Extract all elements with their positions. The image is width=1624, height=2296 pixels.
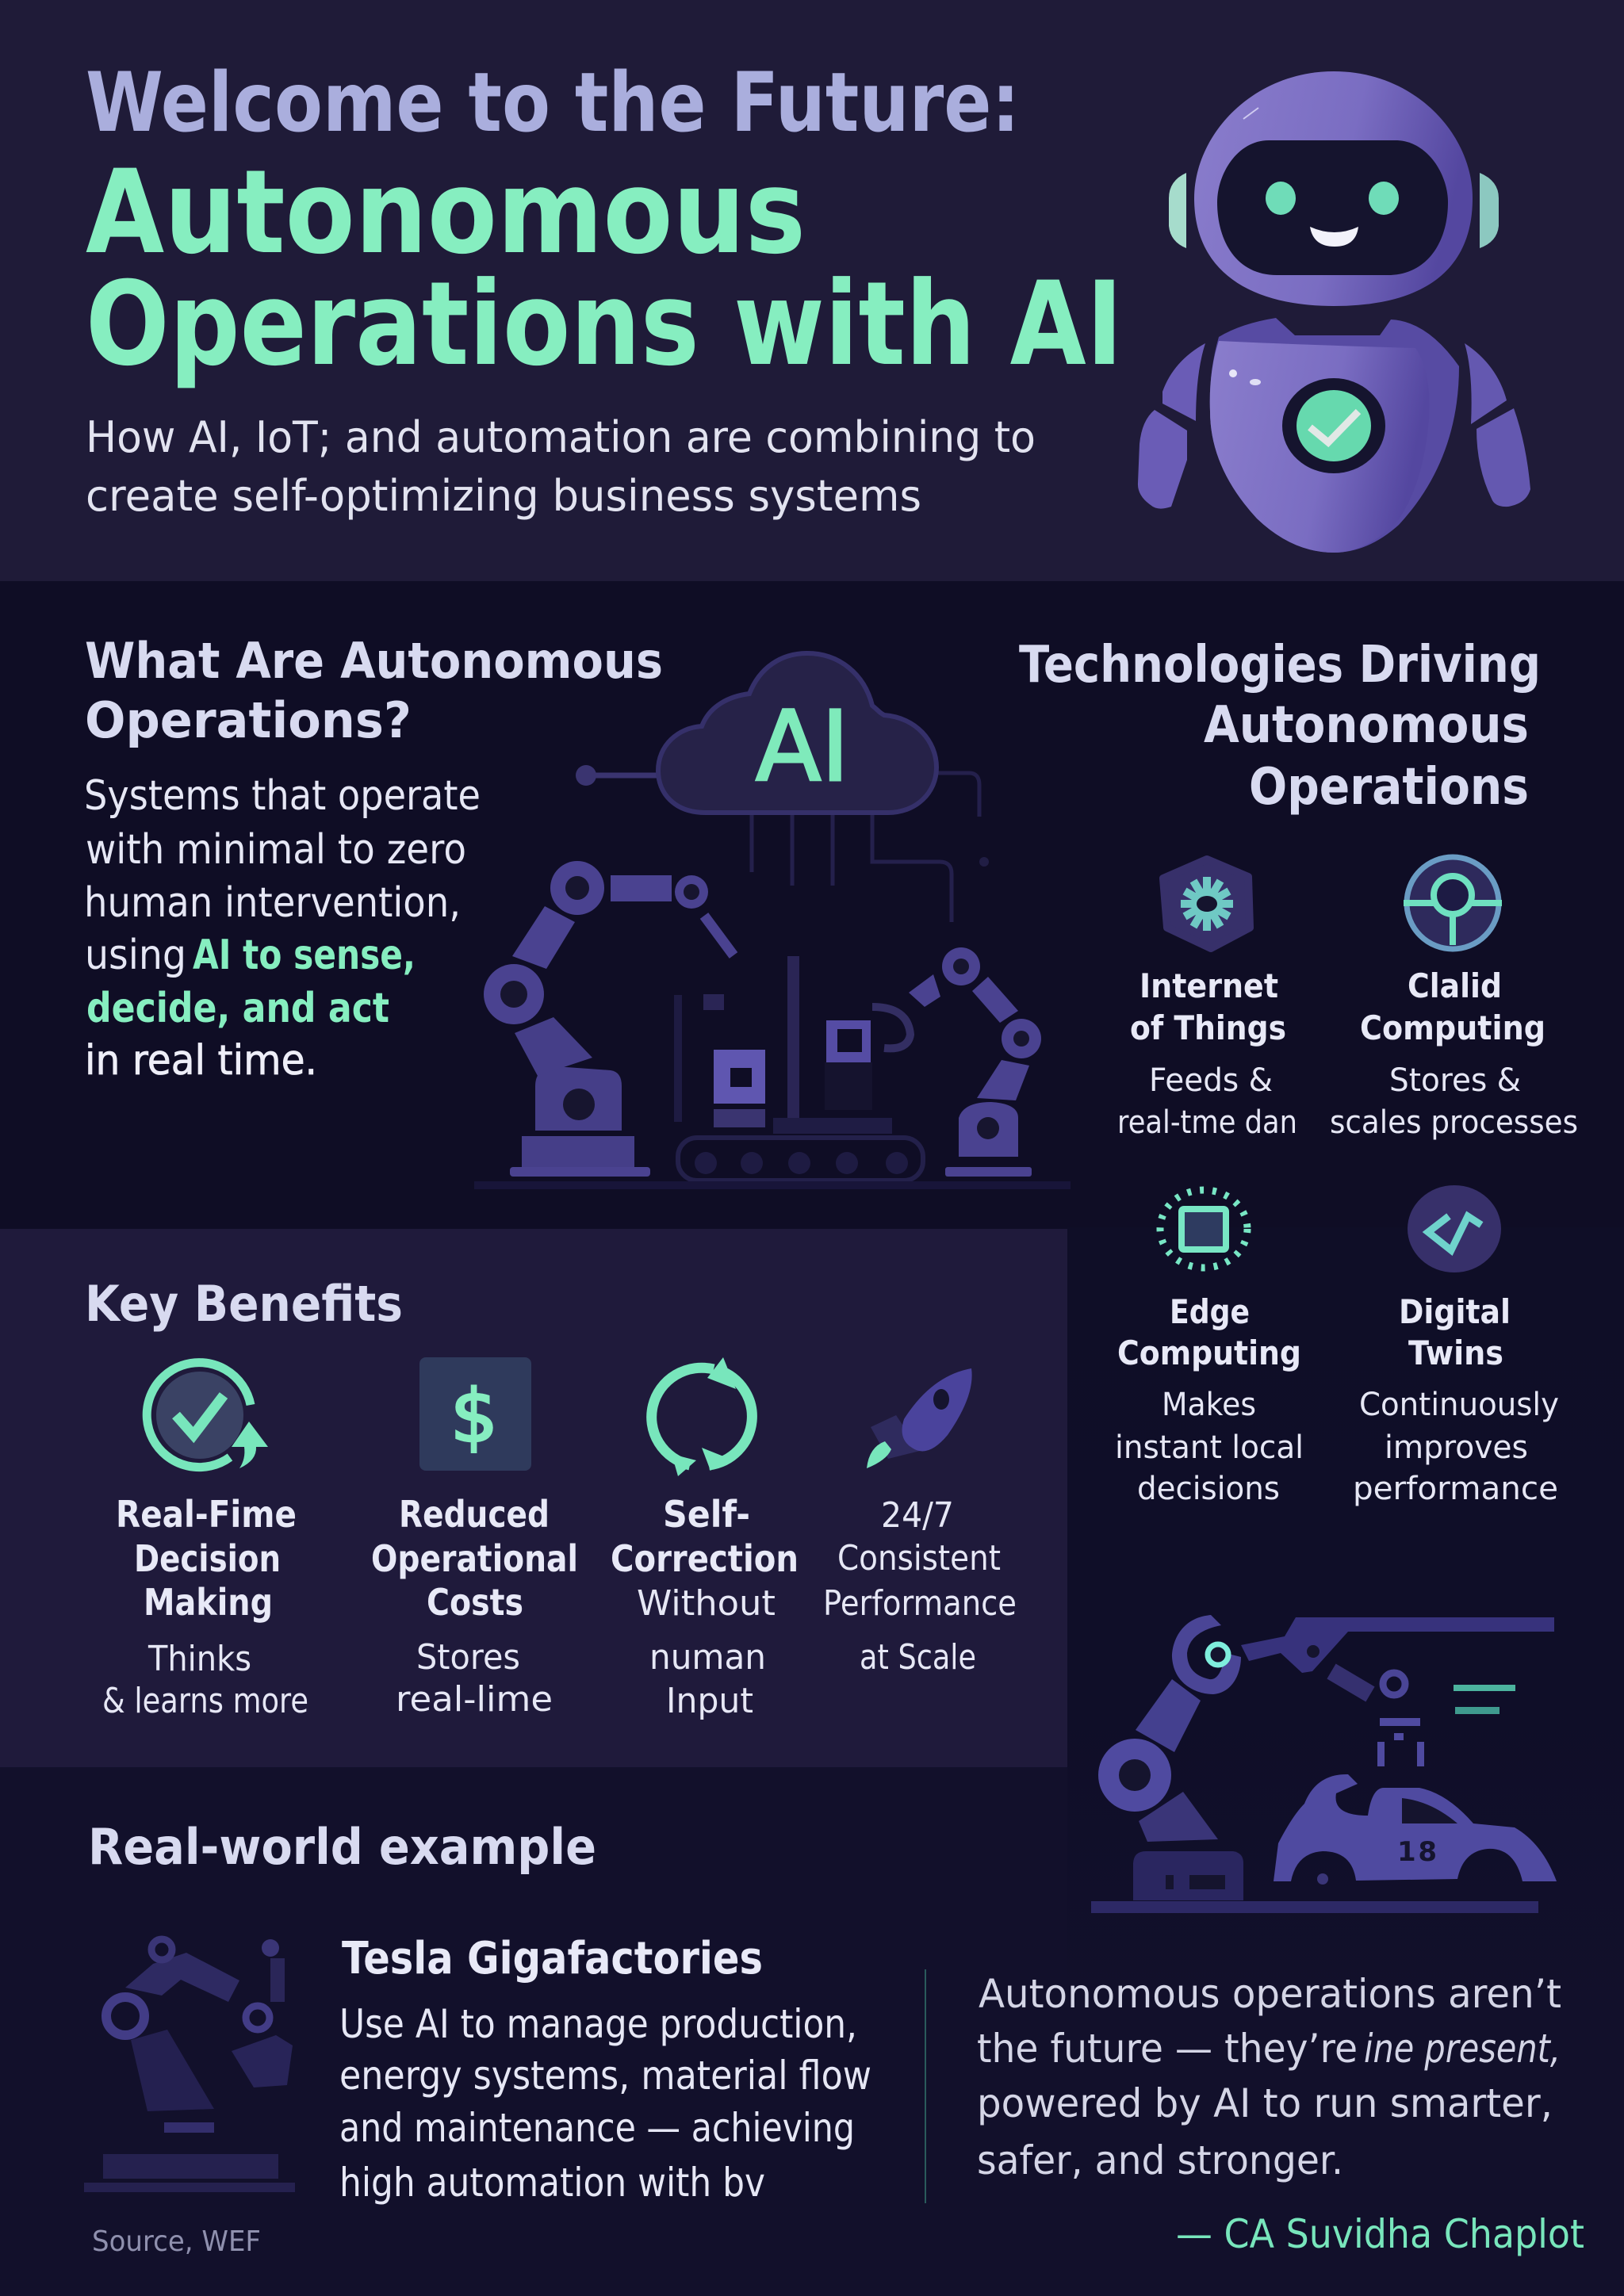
callout: closing quote: ine present, bbox=[1364, 2026, 1561, 2072]
tech item: cloud computing: Stores & bbox=[1389, 1062, 1521, 1099]
text block: definition: decide, and act bbox=[86, 985, 389, 1032]
benefit: real-time decision making bbox=[102, 1363, 308, 1721]
text block: definition: with minimal to zero bbox=[86, 826, 466, 874]
heading: technologies driving autonomous operations: Technologies Driving bbox=[1019, 636, 1541, 695]
icon: car: 18 bbox=[1397, 1836, 1437, 1868]
heading: technologies driving autonomous operations: Autonomous bbox=[1204, 696, 1529, 755]
text block: tesla gigafactories: Tesla Gigafactories bbox=[342, 1933, 763, 1984]
title bbox=[86, 55, 1123, 392]
subtitle: How AI, IoT; and automation are combining to bbox=[86, 412, 1036, 462]
benefit: real-time decision making: Decision bbox=[134, 1537, 281, 1580]
text block: tesla gigafactories bbox=[339, 1933, 871, 2206]
benefit: 24/7 consistent performance: 24/7 bbox=[881, 1495, 954, 1536]
icon: AI cloud bbox=[658, 653, 936, 813]
panel: key benefits bbox=[0, 1229, 1067, 1767]
benefit: 24/7 consistent performance: at Scale bbox=[860, 1637, 976, 1678]
heading: what are autonomous operations: What Are Autonomous bbox=[85, 632, 663, 690]
text block: definition: AI to sense, bbox=[193, 932, 416, 979]
benefit: self-correction: Input bbox=[666, 1681, 753, 1721]
text block: definition bbox=[84, 772, 481, 1085]
tech item: digital twins: Digital bbox=[1399, 1292, 1511, 1331]
tech item: digital twins: Continuously bbox=[1359, 1387, 1559, 1423]
benefit: self-correction bbox=[611, 1357, 799, 1721]
text block: definition: Systems that operate bbox=[84, 772, 481, 820]
panel: technologies grid bbox=[1115, 857, 1578, 1507]
robot arm left bbox=[484, 861, 733, 1177]
benefit: 24/7 consistent performance bbox=[823, 1368, 1017, 1678]
heading: what are autonomous operations: Operations? bbox=[85, 691, 412, 749]
text block: tesla gigafactories: Use AI to manage production, bbox=[339, 2001, 857, 2047]
icon: AI cloud: AI bbox=[756, 691, 849, 803]
tech item: digital twins: performance bbox=[1353, 1471, 1558, 1507]
tech item: internet of things: Internet bbox=[1139, 966, 1278, 1005]
tech item: edge computing bbox=[1115, 1190, 1304, 1507]
icon: car bbox=[1274, 1774, 1557, 1885]
title: Welcome to the Future: bbox=[86, 55, 1020, 151]
tech item: internet of things: real-tme dan bbox=[1117, 1104, 1297, 1141]
benefit: reduced operational costs: Stores bbox=[416, 1637, 520, 1678]
title: Operations with AI bbox=[86, 257, 1123, 392]
benefit: reduced operational costs: $ bbox=[450, 1374, 498, 1459]
tech item: edge computing: instant local bbox=[1115, 1429, 1304, 1466]
tech item: edge computing: decisions bbox=[1137, 1471, 1280, 1507]
benefit: self-correction: Without bbox=[637, 1583, 776, 1624]
benefit: 24/7 consistent performance: Consistent bbox=[837, 1538, 1001, 1578]
panel: what are autonomous operations band bbox=[0, 581, 1624, 1229]
text block: tesla gigafactories: energy systems, material flow bbox=[339, 2053, 871, 2099]
source note: Source, WEF bbox=[92, 2225, 261, 2258]
text block: definition: using bbox=[85, 932, 186, 979]
callout: closing quote: — CA Suvidha Chaplot bbox=[1176, 2211, 1584, 2257]
title: Autonomous bbox=[86, 145, 806, 280]
callout: closing quote bbox=[977, 1971, 1584, 2257]
illustration: factory with AI cloud bbox=[474, 653, 1071, 1189]
heading: what are autonomous operations bbox=[85, 632, 663, 749]
tech item: cloud computing: scales processes bbox=[1330, 1104, 1578, 1141]
robot arm right bbox=[872, 947, 1041, 1177]
heading: technologies driving autonomous operations bbox=[1019, 636, 1541, 817]
panel: right column background bbox=[1067, 1227, 1624, 2020]
benefit: real-time decision making: Making bbox=[144, 1581, 273, 1624]
tech item: internet of things: Feeds & bbox=[1149, 1062, 1273, 1099]
icon: robot mascot bbox=[1138, 71, 1530, 553]
callout: closing quote: Autonomous operations aren’t bbox=[979, 1971, 1561, 2017]
tech item: internet of things bbox=[1117, 859, 1297, 1141]
benefit: reduced operational costs: Reduced bbox=[399, 1493, 550, 1536]
tech item: digital twins: improves bbox=[1385, 1429, 1528, 1466]
text block: definition: human intervention, bbox=[84, 879, 461, 927]
benefit: real-time decision making: & learns more bbox=[102, 1681, 308, 1721]
benefit: 24/7 consistent performance: Performance bbox=[823, 1583, 1017, 1624]
divider bbox=[925, 1969, 926, 2203]
benefit: reduced operational costs bbox=[371, 1357, 578, 1720]
benefit: real-time decision making: Real-Fime bbox=[116, 1493, 297, 1536]
tech item: cloud computing: Clalid bbox=[1408, 966, 1502, 1005]
tech item: cloud computing bbox=[1330, 857, 1578, 1141]
callout: closing quote: the future — they’re bbox=[977, 2026, 1358, 2072]
benefit: real-time decision making: Thinks bbox=[147, 1639, 251, 1679]
tech item: cloud computing: Computing bbox=[1360, 1008, 1545, 1047]
text block: tesla gigafactories: and maintenance — achieving bbox=[339, 2105, 855, 2151]
conveyor with chips bbox=[474, 956, 1071, 1189]
benefit: reduced operational costs: Costs bbox=[427, 1581, 523, 1624]
subtitle bbox=[86, 412, 1036, 521]
benefit: self-correction: numan bbox=[649, 1637, 766, 1678]
text block: tesla gigafactories: high automation with bv bbox=[339, 2160, 765, 2206]
panel: header bbox=[0, 0, 1624, 581]
benefit: reduced operational costs: Operational bbox=[371, 1537, 578, 1580]
heading: technologies driving autonomous operations: Operations bbox=[1249, 758, 1529, 817]
tech item: edge computing: Edge bbox=[1170, 1292, 1250, 1331]
tech item: digital twins bbox=[1353, 1185, 1559, 1507]
tech item: internet of things: of Things bbox=[1130, 1008, 1286, 1047]
heading: real-world example: Real-world example bbox=[88, 1818, 596, 1876]
tech item: edge computing: Computing bbox=[1117, 1334, 1301, 1372]
benefit: self-correction: Correction bbox=[611, 1537, 799, 1580]
tech item: edge computing: Makes bbox=[1162, 1387, 1256, 1423]
illustration: robot arm assembling car bbox=[1091, 1615, 1557, 1913]
benefit: self-correction: Self- bbox=[663, 1493, 750, 1536]
text block: definition: in real time. bbox=[85, 1037, 317, 1085]
benefit: reduced operational costs: real-lime bbox=[396, 1679, 553, 1720]
callout: closing quote: safer, and stronger. bbox=[977, 2137, 1343, 2183]
icon: small robot arm bbox=[84, 1939, 295, 2192]
tech item: digital twins: Twins bbox=[1408, 1334, 1503, 1372]
heading: key benefits: Key Benefits bbox=[85, 1275, 403, 1333]
subtitle: create self-optimizing business systems bbox=[86, 471, 921, 521]
callout: closing quote: powered by AI to run smarter, bbox=[977, 2080, 1553, 2126]
